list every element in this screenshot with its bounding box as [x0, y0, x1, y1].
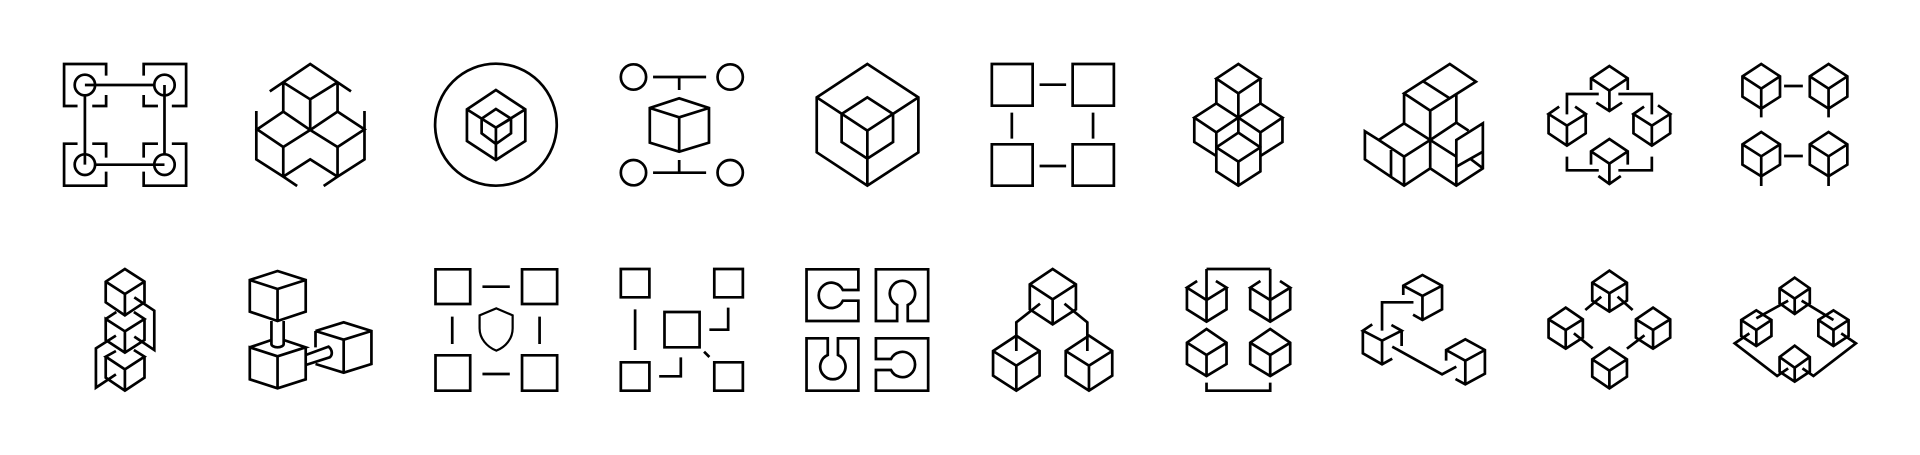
icon: shield among four linked squares: [436, 269, 557, 391]
icon: central square with four satellite squares: [621, 269, 743, 391]
icon: three cubes joined by tubes: [250, 271, 371, 388]
icon: four cubes on stems with links: [1742, 64, 1847, 186]
icon: four puzzle pieces: [807, 269, 928, 391]
icon: four cubes in a cycle with arrows: [1549, 66, 1670, 184]
icon: cube tree with three nodes: [993, 269, 1112, 391]
icon: three cubes connected in a path: [1363, 275, 1485, 384]
icon: four cubes arranged in a diamond: [1549, 271, 1670, 388]
icon: four bracketed nodes linked in a square: [64, 64, 186, 186]
icon: four cubes with brackets: [1187, 269, 1290, 391]
icon: vertical chain of three cubes: [96, 269, 154, 391]
icon: nested cube inside a circle: [435, 64, 557, 186]
icon: cube between four circles: [621, 64, 743, 185]
icon: four cubes on a diamond platform: [1735, 278, 1856, 382]
icon: four linked squares: [992, 64, 1114, 186]
icon: four stacked cubes cluster: [1194, 64, 1282, 186]
icon: cubes with unfolding panels: [1365, 64, 1483, 186]
icon: large cube containing small cube: [817, 64, 918, 186]
icon: three isometric cubes with open edges: [256, 64, 364, 186]
